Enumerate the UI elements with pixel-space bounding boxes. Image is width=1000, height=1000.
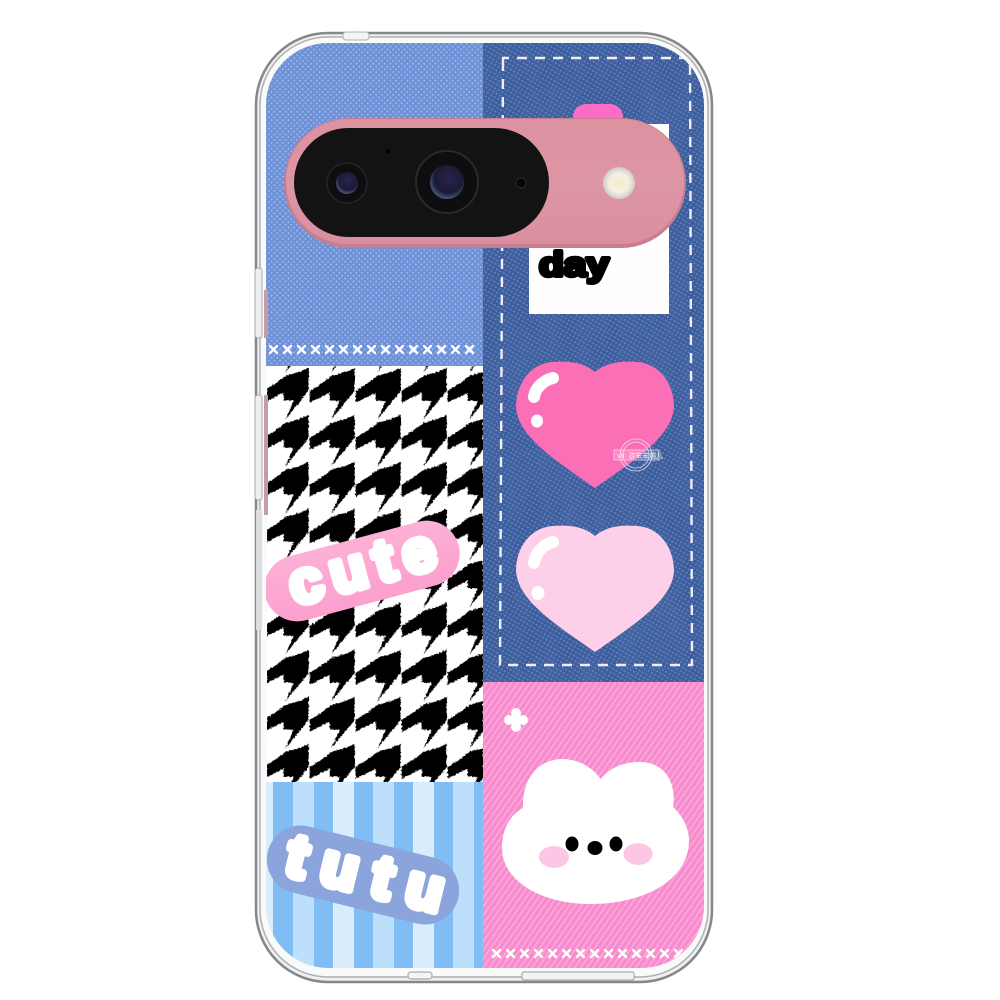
clear case inner edge xyxy=(260,37,708,977)
panel: houndstooth xyxy=(267,366,483,782)
panel: dark denim xyxy=(483,43,704,682)
camera bar xyxy=(284,118,686,248)
bunny face xyxy=(502,759,689,904)
flash xyxy=(603,167,635,199)
top notch xyxy=(343,32,369,40)
pink tab xyxy=(573,104,623,118)
watermark stamp: vb: 游笨笨趣儿 xyxy=(617,451,663,460)
bunny cheek right xyxy=(624,843,652,865)
cross stitches: light denim xyxy=(268,344,474,354)
bunny eye right xyxy=(610,836,622,852)
cute sticker xyxy=(266,520,460,622)
heart: pale pink xyxy=(516,526,674,652)
patchwork back xyxy=(256,43,704,968)
bunny cheek left xyxy=(539,846,569,868)
clear case shell xyxy=(256,33,712,982)
watermark stamp xyxy=(614,439,663,471)
icon: small white cross xyxy=(504,708,528,732)
note word: day: day xyxy=(539,246,609,284)
sticker word: tutu: tutu xyxy=(280,821,451,925)
panel: light denim xyxy=(266,43,483,366)
bunny nose xyxy=(588,841,602,855)
sensor xyxy=(516,178,526,188)
white note xyxy=(529,124,669,314)
panel: blue stripes xyxy=(266,782,483,968)
tutu sticker xyxy=(266,826,460,924)
bunny eye left xyxy=(566,836,578,852)
phone case xyxy=(255,32,712,982)
lens: left xyxy=(327,163,367,203)
heart: hot pink xyxy=(516,362,674,488)
camera window xyxy=(294,128,549,237)
side buttons xyxy=(255,268,268,630)
sticker word: cute: cute xyxy=(281,515,443,618)
cross stitches: pink panel xyxy=(492,948,684,958)
microphone dot xyxy=(386,149,390,153)
bottom ports xyxy=(408,972,634,980)
panel: pink twill xyxy=(483,682,704,968)
dashed pocket stitching xyxy=(500,58,692,665)
lens: main xyxy=(416,151,478,213)
